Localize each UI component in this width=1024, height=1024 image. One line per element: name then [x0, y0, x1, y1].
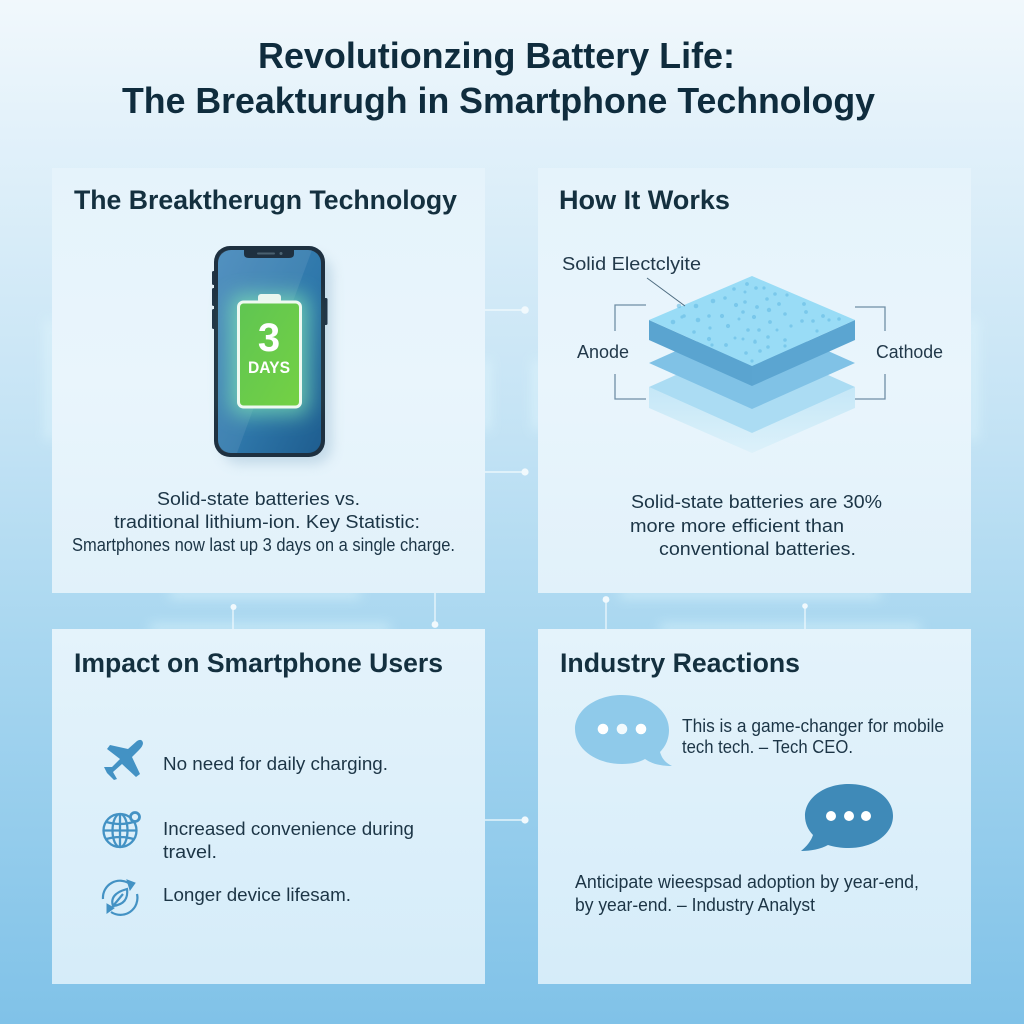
icon: phone with battery — [212, 246, 332, 464]
text block: efficiency: conventional batteries. — [659, 539, 856, 559]
text: convenience: Increased convenience during — [163, 819, 414, 839]
icon: globe with pin — [104, 812, 140, 847]
text block: efficiency: more more efficient than — [630, 516, 844, 536]
label: solid electrolyte: Solid Electclyite — [562, 254, 701, 274]
heading: how it works: How It Works — [559, 185, 730, 215]
top layer — [649, 276, 855, 386]
bracket: cathode — [855, 307, 885, 399]
label: anode: Anode — [577, 342, 629, 362]
leader line: electrolyte — [647, 278, 685, 306]
text block: battery description: traditional lithium-ion. Key Statistic: — [114, 512, 420, 532]
heading: breakthrough technology: The Breaktherugn Technology — [74, 185, 457, 215]
quote: industry analyst: by year-end. – Industry Analyst — [575, 895, 815, 915]
quote: industry analyst — [575, 872, 919, 915]
bracket: anode — [615, 305, 646, 399]
panel: how it works — [538, 168, 971, 593]
icon: speech bubble light — [575, 695, 672, 766]
heading: impact: Impact on Smartphone Users — [74, 648, 443, 678]
quote: tech ceo: This is a game-changer for mobile — [682, 716, 944, 736]
title: The Breakturugh in Smartphone Technology — [122, 80, 875, 121]
text block: battery description — [72, 489, 455, 555]
panel: industry reactions — [538, 629, 971, 984]
text block: efficiency — [630, 492, 882, 559]
panel: impact on smartphone users — [52, 629, 485, 984]
middle layer — [649, 317, 855, 409]
text: lifespan: Longer device lifesam. — [163, 885, 351, 905]
text block: battery description: Solid-state batteries vs. — [157, 489, 360, 509]
quote: tech ceo: tech tech. – Tech CEO. — [682, 737, 853, 757]
lower layer — [649, 387, 855, 453]
panel: the breakthrough technology — [52, 168, 485, 593]
text block: battery description: Smartphones now last up 3 days on a single charge. — [72, 535, 455, 555]
background glow — [47, 320, 976, 632]
text: convenience — [163, 819, 414, 862]
icon: speech bubble dark — [801, 784, 893, 851]
title — [122, 35, 875, 121]
title: Revolutionzing Battery Life: — [258, 35, 735, 76]
connector lines and nodes — [230, 306, 808, 824]
icon: phone with battery: DAYS — [248, 358, 290, 377]
heading: industry reactions: Industry Reactions — [560, 648, 800, 678]
quote: tech ceo — [682, 716, 944, 757]
text: convenience: travel. — [163, 842, 217, 862]
label: cathode: Cathode — [876, 342, 943, 362]
icon: phone with battery: 3 — [258, 316, 280, 360]
text block: efficiency: Solid-state batteries are 30% — [631, 492, 882, 512]
diagram: battery layers — [562, 254, 943, 453]
text: daily charging: No need for daily charging. — [163, 754, 388, 774]
icon: leaf with cycle arrows — [103, 880, 137, 915]
icon: airplane — [104, 740, 143, 780]
quote: industry analyst: Anticipate wieespsad adoption by year-end, — [575, 872, 919, 892]
